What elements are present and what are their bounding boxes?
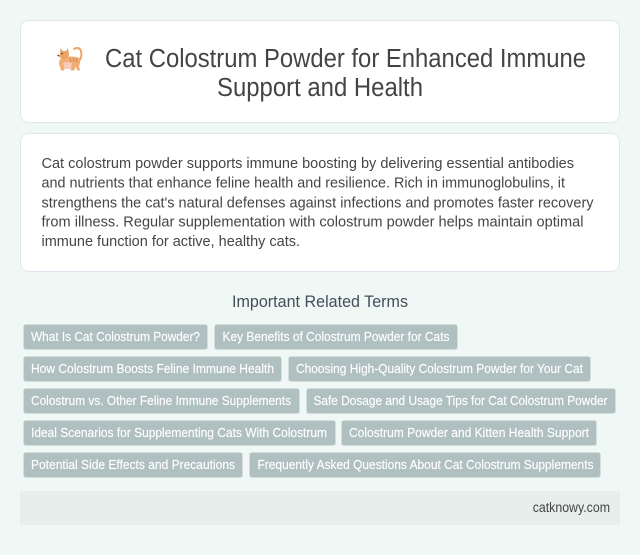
chip: kitten bbox=[342, 420, 596, 446]
panel: title card bbox=[20, 20, 620, 122]
footer bar bbox=[20, 491, 620, 525]
chip: side effects bbox=[24, 452, 242, 478]
chip: scenarios: Ideal Scenarios for Supplementing Cats With Colostrum bbox=[31, 426, 327, 440]
chip: dosage bbox=[306, 388, 616, 414]
chip: versus: Colostrum vs. Other Feline Immune Supplements bbox=[31, 394, 291, 408]
chip: how colostrum boosts bbox=[24, 356, 282, 382]
chip: choosing bbox=[288, 356, 590, 382]
chip: what is bbox=[24, 324, 208, 350]
description text: immune function for active, healthy cats. bbox=[42, 234, 300, 250]
chip: dosage: Safe Dosage and Usage Tips for Cat Colostrum Powder bbox=[314, 394, 608, 408]
description text: from illness. Regular supplementation with colostrum powder helps maintain optimal bbox=[42, 214, 584, 230]
description text: Cat colostrum powder supports immune boosting by delivering essential antibodies bbox=[42, 156, 574, 172]
footer: site name: catknowy.com bbox=[533, 500, 610, 515]
chip: scenarios bbox=[24, 420, 336, 446]
title text: Support and Health bbox=[217, 74, 423, 102]
panel: description card bbox=[20, 134, 620, 272]
chip: key benefits bbox=[214, 324, 458, 350]
icon: cat bbox=[57, 48, 81, 70]
chip: versus bbox=[24, 388, 300, 414]
related terms chips bbox=[24, 324, 616, 478]
chip: what is: What Is Cat Colostrum Powder? bbox=[31, 330, 200, 344]
chip: faq: Frequently Asked Questions About Cat Colostrum Supplements bbox=[258, 458, 594, 472]
chip: choosing: Choosing High-Quality Colostrum Powder for Your Cat bbox=[296, 362, 583, 376]
description text: and nutrients that enhance feline health and resilience. Rich in immunoglobulins, it bbox=[42, 176, 565, 192]
chip: kitten: Colostrum Powder and Kitten Health Support bbox=[349, 426, 589, 440]
description text bbox=[42, 156, 594, 250]
description text: strengthens the cat's natural defenses against infections and promotes faster recovery bbox=[42, 196, 594, 212]
title text: Cat Colostrum Powder for Enhanced Immune bbox=[105, 45, 586, 73]
heading: important related terms: Important Related Terms bbox=[232, 293, 408, 311]
chip: side effects: Potential Side Effects and Precautions bbox=[31, 458, 235, 472]
chip: how colostrum boosts: How Colostrum Boosts Feline Immune Health bbox=[31, 362, 274, 376]
title text bbox=[105, 45, 586, 102]
chip: faq bbox=[250, 452, 600, 478]
chip: key benefits: Key Benefits of Colostrum Powder for Cats bbox=[222, 330, 450, 344]
